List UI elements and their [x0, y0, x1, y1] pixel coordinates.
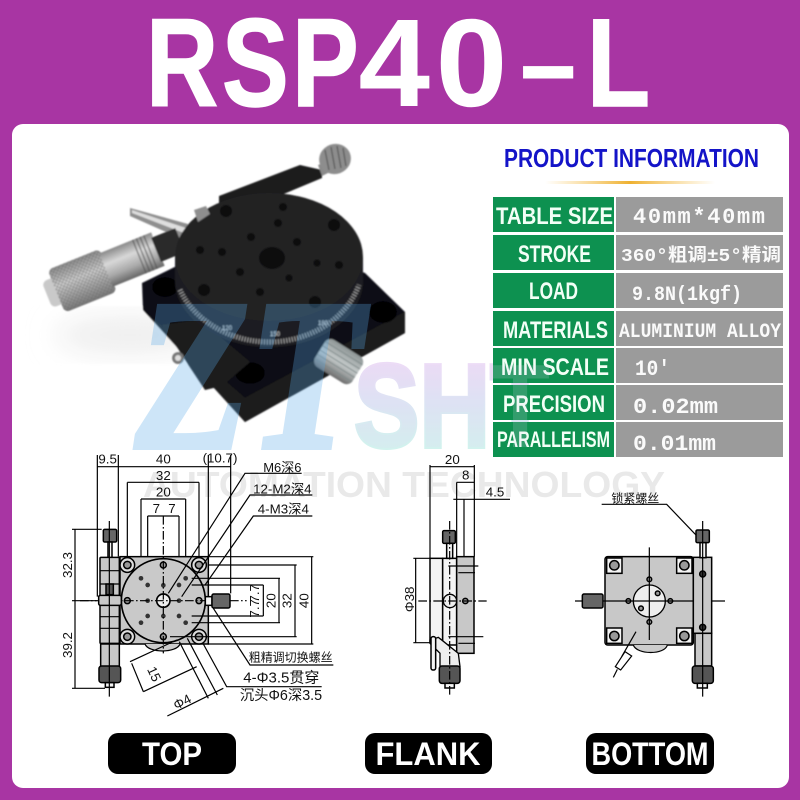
row labels: PRECISION — [503, 391, 605, 418]
dimension values: 7 — [168, 501, 176, 516]
callout: locking screw — [602, 490, 696, 535]
watermark: SHT letters: SHT — [354, 340, 550, 473]
value cells — [616, 197, 783, 457]
scale numbers: 120 — [222, 326, 233, 332]
dimension values: 32 — [156, 468, 171, 483]
panel: product information — [493, 143, 783, 457]
dimension values: 20 — [445, 452, 460, 467]
scale numbers: 180 — [318, 321, 329, 327]
rotary table top — [175, 193, 363, 321]
drawing: flank view — [402, 452, 510, 697]
watermark: ZT logo: ZT — [135, 257, 368, 494]
disc holes — [124, 562, 202, 640]
front knurled knob — [312, 336, 366, 387]
corner mounts — [607, 558, 692, 643]
micrometer — [99, 521, 121, 697]
callouts: threaded holes — [168, 460, 312, 597]
callout: through holes — [203, 644, 322, 704]
watermark: automation technology: AUTOMATION TECHNOLOGY — [143, 464, 665, 505]
row labels — [496, 203, 613, 452]
left offset dimensions — [72, 529, 105, 688]
soft photo shadow — [55, 317, 205, 353]
label cells — [493, 197, 614, 457]
plate mounting holes — [152, 277, 178, 297]
row values: ALUMINIUM ALLOY — [619, 321, 781, 344]
extension lines — [97, 455, 231, 597]
dimension values: 7.7 — [247, 584, 262, 603]
row values — [619, 205, 781, 457]
label: FLANK: FLANK — [376, 736, 480, 772]
row labels: TABLE SIZE — [496, 203, 613, 230]
lower wedge and pin — [430, 637, 460, 688]
bottom nub — [633, 645, 667, 652]
row values: 40mm*40mm — [633, 205, 765, 230]
dimension values: (10.7) — [203, 451, 237, 466]
body layers — [430, 557, 483, 653]
row labels: STROKE — [518, 241, 591, 268]
pointer pin with 15 and Φ4 dimensions — [130, 638, 223, 716]
centre lines — [418, 521, 487, 697]
callout: through holes: 4-Φ3.5贯穿 — [243, 669, 319, 686]
drawing: top view — [60, 451, 333, 716]
left knob — [582, 594, 603, 608]
rear fine adjust screw — [219, 139, 355, 208]
row values: 9.8N(1kgf) — [632, 284, 742, 307]
dimension values — [60, 451, 311, 658]
side set screw — [172, 352, 184, 364]
micrometer — [38, 220, 189, 316]
pointer pin — [613, 632, 636, 677]
row labels: MIN SCALE — [501, 354, 609, 381]
label: TOP: TOP — [142, 736, 202, 772]
dimension values — [402, 452, 504, 612]
drawing: bottom view — [575, 490, 725, 697]
row labels: LOAD — [529, 278, 578, 305]
scale numbers — [222, 321, 329, 338]
dimension values: 20 — [156, 485, 171, 500]
dimension values: 7 — [153, 501, 160, 516]
callout: locking screw: 锁紧螺丝 — [611, 490, 659, 505]
label: TOP — [108, 733, 236, 774]
watermark tint over table: SHT — [354, 340, 550, 473]
callouts: threaded holes: 12-M2深4 — [253, 481, 312, 496]
spec table — [493, 197, 783, 457]
pointer pin with 15 and Φ4 dimensions: Φ4 — [171, 691, 194, 713]
micrometer side — [692, 521, 713, 697]
centre lines — [80, 516, 247, 653]
callout: through holes: 沉头Φ6深3.5 — [240, 687, 322, 704]
centre bore and holes — [626, 577, 673, 624]
row values: 0.02mm — [633, 395, 718, 420]
right dimensions — [170, 557, 313, 644]
rotary disc — [121, 559, 205, 643]
scale numbers: 150 — [270, 332, 281, 338]
base square — [605, 557, 693, 645]
row labels: MATERIALS — [503, 317, 608, 344]
bottom nub — [145, 644, 180, 651]
dimension values: 20 — [264, 593, 279, 608]
table holes — [196, 203, 343, 308]
row values: 360°粗调±5°精调 — [621, 245, 781, 267]
callout: coarse/fine switch screw — [213, 608, 333, 665]
callouts: threaded holes: M6深6 — [263, 460, 301, 475]
dimension values: 9.5 — [98, 452, 117, 467]
side knob — [443, 531, 455, 558]
rear silver stud — [194, 206, 210, 222]
callout: coarse/fine switch screw: 粗精调切换螺丝 — [249, 650, 333, 664]
heading underline — [545, 181, 715, 184]
dimension values: 40 — [296, 593, 311, 608]
title — [146, 0, 650, 133]
tapered pointer pin — [130, 208, 188, 240]
corner mounts — [120, 558, 206, 644]
product photo: rotary stage with micrometer — [38, 139, 405, 422]
row values: 10' — [635, 357, 670, 382]
dimension values: 39.2 — [60, 632, 75, 658]
angle scale ticks — [180, 285, 359, 342]
dimension lines — [97, 467, 231, 516]
body square — [120, 557, 208, 644]
row values: 0.01mm — [633, 432, 716, 457]
dimension values: 32.3 — [60, 552, 75, 578]
extension and dimension lines — [413, 465, 510, 643]
centre lines — [575, 547, 725, 640]
dimension values: 40 — [156, 452, 171, 467]
right knob — [205, 594, 230, 608]
dimension values: 7.7 — [247, 599, 262, 618]
rotary table side with scale — [175, 257, 363, 347]
dimension values: Φ38 — [402, 587, 417, 612]
pointer pin with 15 and Φ4 dimensions: 15 — [144, 664, 164, 684]
base plate — [142, 230, 405, 422]
label: BOTTOM: BOTTOM — [592, 736, 708, 772]
dimension values: 4.5 — [486, 485, 504, 500]
dimension values: 8 — [462, 468, 469, 483]
side holes — [443, 594, 468, 608]
row labels: PARALLELISM — [497, 427, 610, 452]
lower body — [162, 320, 250, 390]
dimension values: 32 — [280, 593, 295, 608]
callouts: threaded holes: 4-M3深4 — [258, 501, 309, 516]
